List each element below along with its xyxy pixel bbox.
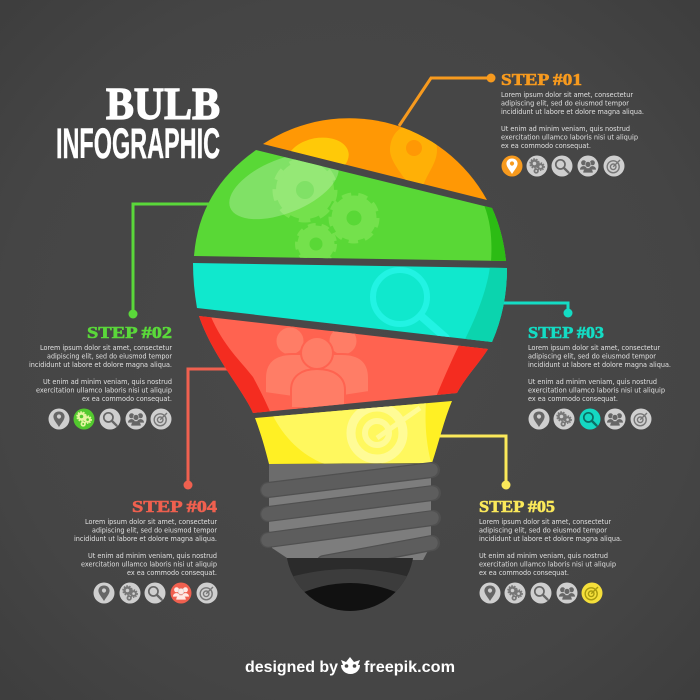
text block: step 04: incididunt ut labore et dolore magna aliqua. xyxy=(74,534,217,543)
title: INFOGRAPHIC xyxy=(56,120,220,168)
footer credit: freepik.com xyxy=(364,659,455,676)
icon: yellow highlight xyxy=(291,138,349,164)
text block: step 02: adipiscing elit, sed do eiusmod tempor xyxy=(47,352,172,360)
bulb screw base xyxy=(268,464,433,563)
text block: step 05: Lorem ipsum dolor sit amet, consectetur xyxy=(479,517,611,526)
bulb segment: teal xyxy=(193,263,507,342)
text block: step 04: adipiscing elit, sed do eiusmod tempor xyxy=(92,526,217,534)
icon: target xyxy=(351,407,420,459)
heading: step 05: STEP #05 xyxy=(479,497,555,516)
title: BULB xyxy=(106,78,220,129)
connector: step 2 xyxy=(133,204,212,314)
text block: step 02: incididunt ut labore et dolore magna aliqua. xyxy=(29,360,172,369)
icon row: step 02 xyxy=(48,408,172,430)
text block: step 03: adipiscing elit, sed do eiusmod tempor xyxy=(528,352,656,360)
text block: step 02: exercitation ullamco laboris nisi ut aliquip xyxy=(36,386,172,394)
heading: step 01: STEP #01 xyxy=(501,70,582,89)
footer credit xyxy=(245,657,455,676)
bulb segment: green xyxy=(194,150,506,261)
text block: step 03: Ut enim ad minim veniam, quis nostrud xyxy=(528,377,657,386)
title xyxy=(56,78,220,168)
icon row: step 04 xyxy=(94,582,218,604)
text block: step 01 xyxy=(501,90,644,150)
text block: step 05: incididunt ut labore et dolore magna aliqua. xyxy=(479,534,622,543)
text block: step 02: Lorem ipsum dolor sit amet, consectetur xyxy=(40,343,172,352)
icon: magnifier xyxy=(373,270,446,338)
icon: freepik logo xyxy=(341,657,360,674)
heading: step 04: STEP #04 xyxy=(132,497,218,516)
icon row: step 01 xyxy=(502,156,624,176)
text block: step 03: exercitation ullamco laboris nisi ut aliquip xyxy=(528,386,665,394)
text block: step 05 xyxy=(479,517,622,577)
footer credit: designed by xyxy=(245,659,338,676)
bulb segment: orange xyxy=(263,118,487,200)
panel: step 01 xyxy=(486,70,644,176)
text block: step 02 xyxy=(29,343,172,403)
text block: step 03 xyxy=(528,343,671,403)
text block: step 01: Ut enim ad minim veniam, quis nostrud xyxy=(501,124,630,133)
icon: gears xyxy=(276,161,376,262)
text block: step 03: incididunt ut labore et dolore magna aliqua. xyxy=(528,360,671,369)
connector: step 1 xyxy=(399,78,491,126)
text block: step 05: exercitation ullamco laboris nisi ut aliquip xyxy=(479,560,616,568)
panel: step 03 xyxy=(528,308,671,430)
text block: step 05: ex ea commodo consequat. xyxy=(479,568,569,577)
panel: step 04 xyxy=(74,480,218,604)
light bulb xyxy=(190,110,510,618)
connector: step 3 xyxy=(478,303,568,313)
text block: step 02: ex ea commodo consequat. xyxy=(82,394,172,403)
bulb segment: yellow xyxy=(255,401,452,464)
icon row: step 05 xyxy=(480,582,602,604)
icon: location pin xyxy=(390,125,437,186)
text block: step 01: ex ea commodo consequat. xyxy=(501,141,591,150)
text block: step 04: Ut enim ad minim veniam, quis nostrud xyxy=(88,551,217,560)
bulb segment: red xyxy=(199,316,488,413)
panel: step 05 xyxy=(479,480,622,604)
text block: step 01: incididunt ut labore et dolore magna aliqua. xyxy=(501,107,644,116)
connector: step 5 xyxy=(415,436,506,485)
icon row: step 03 xyxy=(528,408,652,430)
heading: step 02: STEP #02 xyxy=(87,323,172,342)
text block: step 03: Lorem ipsum dolor sit amet, consectetur xyxy=(528,343,660,352)
text block: step 01: Lorem ipsum dolor sit amet, consectetur xyxy=(501,90,633,99)
text block: step 04 xyxy=(74,517,217,577)
text block: step 03: ex ea commodo consequat. xyxy=(528,394,618,403)
icon: people xyxy=(265,326,369,408)
text block: step 05: Ut enim ad minim veniam, quis nostrud xyxy=(479,551,608,560)
heading: step 03: STEP #03 xyxy=(528,323,604,342)
highlight ellipse xyxy=(229,157,338,220)
text block: step 04: ex ea commodo consequat. xyxy=(127,568,217,577)
connector: step 4 xyxy=(188,369,250,485)
text block: step 04: exercitation ullamco laboris nisi ut aliquip xyxy=(81,560,217,568)
text block: step 05: adipiscing elit, sed do eiusmod tempor xyxy=(479,526,607,534)
panel: step 02 xyxy=(29,310,172,430)
bulb cap xyxy=(287,558,413,611)
text block: step 01: exercitation ullamco laboris nisi ut aliquip xyxy=(501,132,638,142)
text block: step 04: Lorem ipsum dolor sit amet, consectetur xyxy=(85,517,217,526)
text block: step 01: adipiscing elit, sed do eiusmod tempor xyxy=(501,98,629,108)
text block: step 02: Ut enim ad minim veniam, quis nostrud xyxy=(43,377,172,386)
